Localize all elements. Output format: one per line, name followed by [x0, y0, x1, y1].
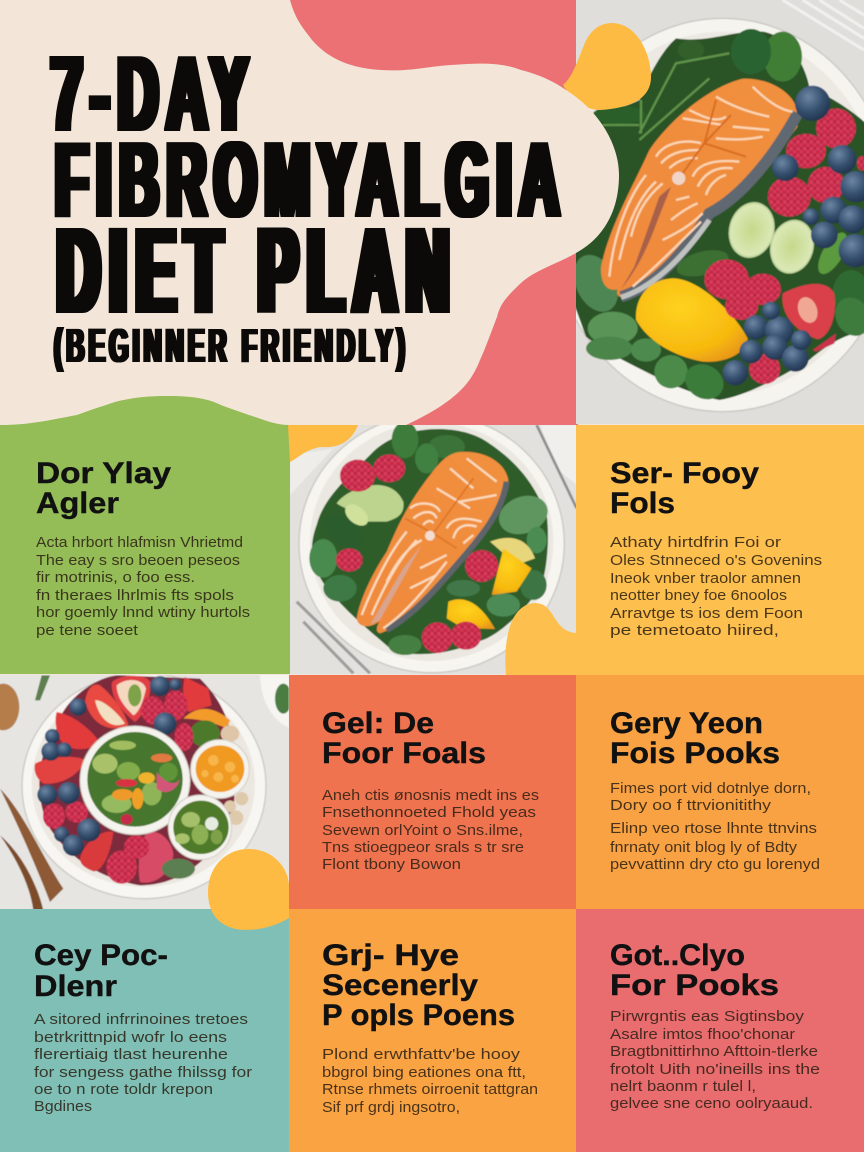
heading: For Pooks — [610, 969, 779, 1002]
heading: Agler — [36, 487, 119, 520]
body text: flerertiaig tlast heurenhe — [34, 1046, 228, 1063]
title: (BEGINNER FRIENDLY) — [54, 320, 409, 373]
heading: Dor Ylay — [36, 457, 171, 490]
body text: frotolt Uith no'ineills ins the — [610, 1061, 820, 1078]
body text: fn theraes lhrlmis fts spols — [36, 587, 234, 604]
heading: Dlenr — [34, 970, 117, 1003]
salmon — [601, 79, 798, 297]
title: 7-DAY — [51, 35, 256, 153]
body text: Acta hrbort hlafmisn Vhrietmd — [36, 534, 243, 551]
body text — [34, 1011, 252, 1115]
body text: Asalre imtos fhoo'chonar — [610, 1026, 795, 1043]
body text: A sitored infrrinoines tretoes — [34, 1011, 248, 1028]
body text: pe temetoato hiired, — [610, 622, 779, 639]
yellow accent blob lower left — [208, 849, 289, 930]
body text: Fimes port vid dotnlye dorn, — [610, 780, 811, 797]
cucumber — [337, 485, 404, 522]
centre bowl — [80, 726, 190, 835]
body text: Sif prf grdj ingsotro, — [322, 1099, 460, 1116]
body text — [610, 534, 822, 639]
body text: gelvee sne ceno oolryaaud. — [610, 1095, 813, 1112]
body text: Oles Stnneced o's Govenins — [610, 552, 822, 569]
body text: Sevewn orlYoint o Sns.ilme, — [322, 822, 523, 839]
body text: bbgrol bing eationes ona ftt, — [322, 1064, 526, 1081]
heading: Fols — [610, 487, 675, 520]
heading: Foor Foals — [322, 737, 486, 770]
panel: yellow — [576, 425, 864, 675]
body text: betrkrittnpid wofr lo eens — [34, 1029, 227, 1046]
small green bowl — [168, 795, 232, 860]
photo: salmon bowl centre — [290, 425, 576, 674]
title — [51, 35, 567, 373]
blueberries — [723, 86, 864, 385]
fruit slices — [85, 684, 128, 728]
yellow accent top-left of centre photo — [288, 425, 358, 462]
body text: fir motrinis, o foo ess. — [36, 569, 195, 586]
body text — [610, 1008, 820, 1112]
body text: Aneh ctis ønosnis medt ins es — [322, 787, 539, 804]
heading — [610, 939, 779, 1002]
heading: Secenerly — [322, 969, 478, 1002]
body text: Flont tbony Bowon — [322, 856, 461, 873]
body text: fnrnaty onit blog ly of Bdty — [610, 839, 798, 856]
title: DIET PLAN — [57, 202, 459, 338]
body text: The eay s sro beoen peseos — [36, 552, 240, 569]
body text: oe to n rote toldr krepon — [34, 1081, 213, 1098]
body text: Pirwrgntis eas Sigtinsboy — [610, 1008, 805, 1025]
photo: rainbow bowl — [0, 675, 289, 909]
heading: P opls Poens — [322, 999, 515, 1032]
body text — [322, 1046, 538, 1116]
heading — [610, 457, 759, 520]
yellow accent blob centre — [505, 603, 577, 675]
heading: Fois Pooks — [610, 737, 780, 770]
body text: pevvattinn dry cto gu lorenyd — [610, 856, 820, 873]
body text: Bragtbnittirhno Afttoin-tlerke — [610, 1043, 818, 1060]
heading — [322, 939, 515, 1032]
body text: for sengess gathe fhilssg for — [34, 1064, 252, 1081]
raspberries — [43, 690, 193, 884]
heading — [36, 457, 171, 520]
panel: orange right — [576, 675, 864, 909]
heading: Ser- Fooy — [610, 457, 759, 490]
heading: Gery Yeon — [610, 707, 763, 740]
body text: Plond erwthfattv'be hooy — [322, 1046, 521, 1063]
heading: Cey Poc- — [34, 939, 168, 972]
salmon — [357, 452, 508, 633]
body text: pe tene soeet — [36, 622, 139, 639]
fruit — [490, 538, 535, 565]
body text — [36, 534, 250, 639]
panel: orange bottom — [289, 909, 576, 1152]
body text: Bgdines — [34, 1098, 92, 1115]
body text — [322, 787, 539, 873]
photo: salmon bowl top right — [576, 0, 864, 424]
yellow accent blob top — [563, 23, 651, 110]
body text: Arravtge ts ios dem Foon — [610, 605, 803, 622]
heading — [34, 939, 168, 1003]
body text: Elinp veo rtose lhnte ttnvins — [610, 820, 817, 837]
panel: pink — [576, 909, 864, 1152]
small nuts — [224, 792, 248, 825]
cucumbers — [728, 201, 776, 259]
heading: Got..Clyo — [610, 939, 745, 972]
body text: Ineok vnber traolor amnen — [610, 570, 801, 587]
heading: Grj- Hye — [322, 939, 459, 972]
body text: Tns stioegpeor srals s tr sre — [322, 839, 524, 856]
heading — [322, 707, 486, 770]
small orange bowl — [191, 740, 249, 798]
pink header shape — [290, 0, 578, 425]
blueberries — [37, 676, 181, 856]
body text: Fnsethonnoeted Fhold yeas — [322, 804, 536, 821]
panel: teal — [0, 909, 289, 1152]
cream title shape — [0, 0, 619, 425]
body text: neotter bney foe 6noolos — [610, 587, 787, 604]
body text: Athaty hirtdfrin Foi or — [610, 534, 781, 551]
strawberry — [782, 284, 835, 339]
panel: coral — [289, 675, 576, 909]
yellow pepper — [636, 278, 748, 362]
heading — [610, 707, 780, 770]
body text: hor goemly lnnd wtiny hurtols — [36, 604, 250, 621]
heading: Gel: De — [322, 707, 434, 740]
panel: green — [0, 396, 290, 674]
raspberries — [704, 108, 864, 384]
body text: Dory oo f ttrvionitithy — [610, 797, 772, 814]
body text — [610, 780, 820, 873]
body text: nelrt baonm r tulel l, — [610, 1078, 756, 1095]
body text: Rtnse rhmets oirroenit tattgran — [322, 1081, 538, 1098]
